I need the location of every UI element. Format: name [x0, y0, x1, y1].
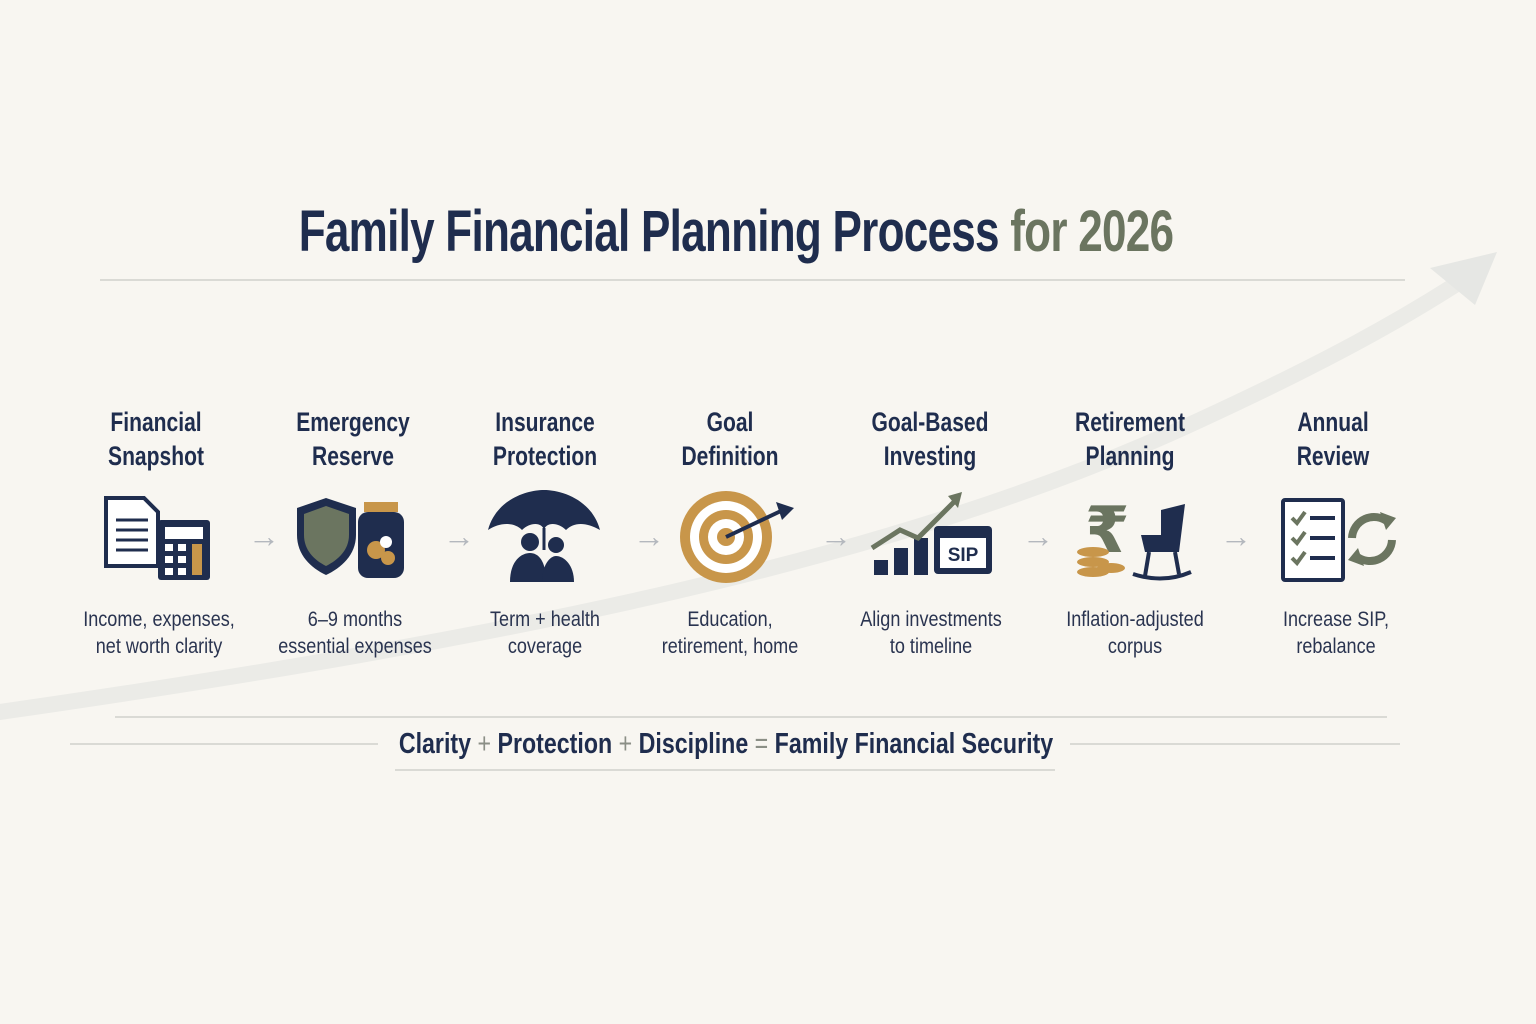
step 5 heading — [871, 407, 989, 471]
step 3 heading — [493, 407, 597, 471]
arrow: → — [1022, 518, 1054, 554]
icon: shield and jar — [297, 498, 404, 578]
step 4 heading — [681, 407, 779, 471]
step 4 caption: retirement, home — [662, 635, 798, 658]
step 7 heading — [1297, 407, 1370, 471]
step 5 caption: to timeline — [890, 635, 972, 658]
step 4 caption: Education, — [687, 608, 773, 631]
step 1 caption: Income, expenses, — [83, 608, 235, 631]
icon: rupee and rocking chair: ₹ — [1085, 494, 1130, 568]
step 2 heading: Reserve — [312, 441, 394, 471]
step 6 heading: Planning — [1086, 441, 1174, 471]
step 5 heading: Goal-Based — [871, 407, 989, 437]
step 3 heading: Insurance — [495, 407, 595, 437]
step 4 heading: Definition — [681, 441, 779, 471]
step 4 caption — [662, 608, 798, 658]
step 7 caption — [1283, 608, 1389, 658]
step 6 caption — [1066, 608, 1204, 658]
step 1 caption: net worth clarity — [96, 635, 222, 658]
arrow: → — [443, 518, 475, 554]
step 5 caption: Align investments — [860, 608, 1002, 631]
step 7 caption: rebalance — [1296, 635, 1376, 658]
step 5 caption — [860, 608, 1002, 658]
step 1 heading — [108, 407, 204, 471]
step 3 caption: Term + health — [490, 608, 600, 631]
step 2 caption: essential expenses — [278, 635, 432, 658]
step 1 caption — [83, 608, 235, 658]
icon: rupee and rocking chair — [1077, 494, 1192, 580]
arrow: → — [633, 518, 665, 554]
step 6 heading — [1075, 407, 1185, 471]
icon: growth chart with SIP — [870, 492, 992, 575]
step 3 caption: coverage — [508, 635, 582, 658]
arrow: → — [248, 518, 280, 554]
step 2 heading: Emergency — [296, 407, 410, 437]
icon: umbrella family — [488, 490, 600, 582]
step 6 caption: corpus — [1108, 635, 1162, 658]
tagline: Clarity + Protection + Discipline = Family Financial Security — [399, 728, 1053, 760]
step 1 heading: Snapshot — [108, 441, 204, 471]
step 2 heading — [296, 407, 410, 471]
step 3 caption — [490, 608, 600, 658]
title: Family Financial Planning Process for 2026 — [299, 199, 1173, 264]
step 6 caption: Inflation-adjusted — [1066, 608, 1204, 631]
icon: document and calculator — [104, 496, 210, 580]
step 7 caption: Increase SIP, — [1283, 608, 1389, 631]
icon: checklist with refresh — [1281, 498, 1396, 582]
arrow: → — [1220, 518, 1252, 554]
icon: growth chart with SIP: SIP — [948, 545, 979, 566]
step 6 heading: Retirement — [1075, 407, 1185, 437]
icon: target — [680, 491, 794, 583]
step 7 heading: Review — [1297, 441, 1369, 471]
step 1 heading: Financial — [110, 407, 202, 437]
step 2 caption — [278, 608, 432, 658]
step 3 heading: Protection — [493, 441, 597, 471]
arrow: → — [820, 518, 852, 554]
step 2 caption: 6–9 months — [308, 608, 402, 631]
step 4 heading: Goal — [707, 407, 753, 437]
step 7 heading: Annual — [1297, 407, 1369, 437]
step 5 heading: Investing — [884, 441, 976, 471]
